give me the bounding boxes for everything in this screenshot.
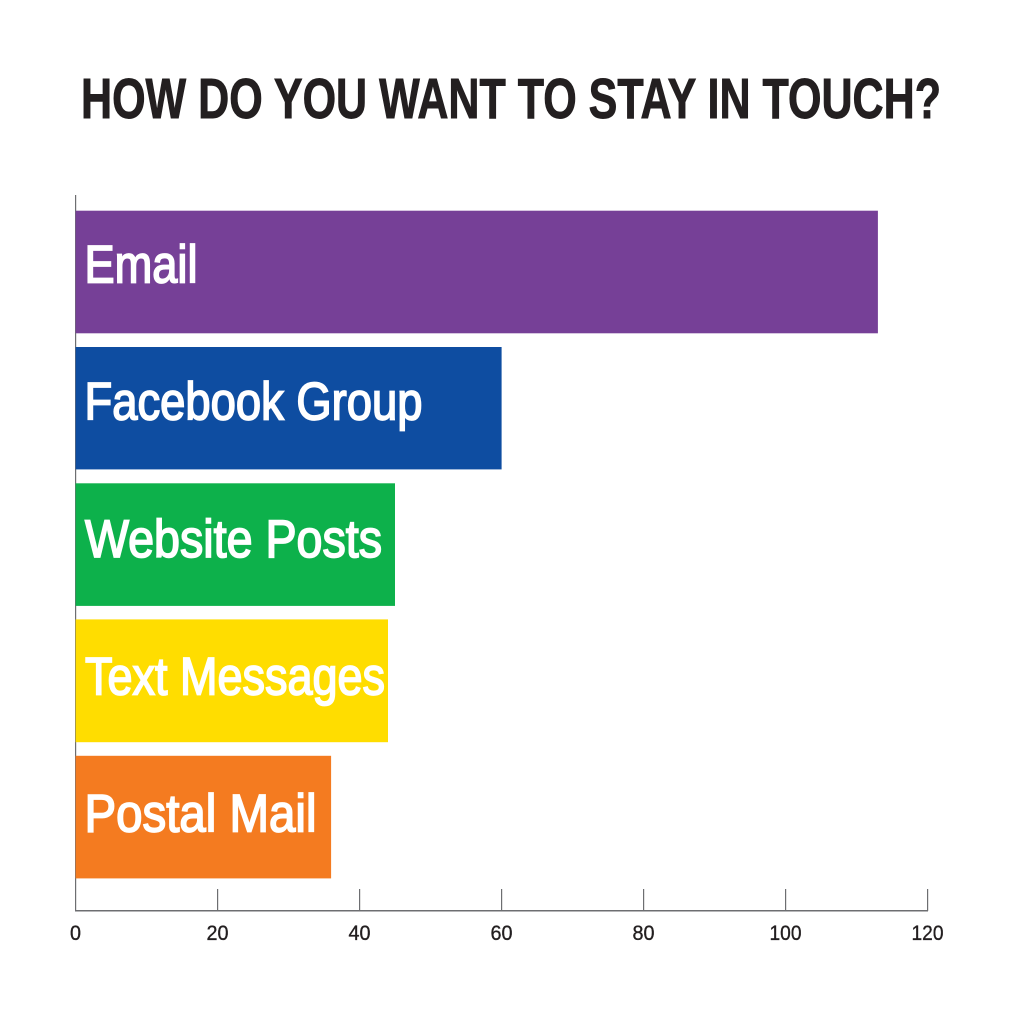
bar chart — [76, 211, 878, 878]
bar: Email — [76, 211, 878, 333]
bar: Postal Mail: Postal Mail — [84, 785, 316, 844]
axis labels: 0 — [70, 921, 81, 945]
bar: Facebook Group — [76, 347, 502, 469]
axis labels — [70, 921, 944, 945]
bar: Text Messages — [76, 619, 388, 742]
axis labels: 60 — [490, 921, 513, 945]
axis labels: 40 — [348, 921, 371, 945]
axis labels: 100 — [770, 921, 802, 945]
axis labels: 20 — [206, 921, 229, 945]
axes — [75, 195, 928, 911]
bar: Website Posts: Website Posts — [85, 510, 382, 569]
bar: Email: Email — [84, 236, 198, 295]
axis labels: 120 — [912, 921, 944, 945]
bar: Postal Mail — [76, 756, 331, 878]
bar: Facebook Group: Facebook Group — [84, 373, 422, 432]
bar: Website Posts — [76, 483, 395, 606]
bar: Text Messages: Text Messages — [85, 648, 385, 707]
axis labels: 80 — [632, 921, 655, 945]
